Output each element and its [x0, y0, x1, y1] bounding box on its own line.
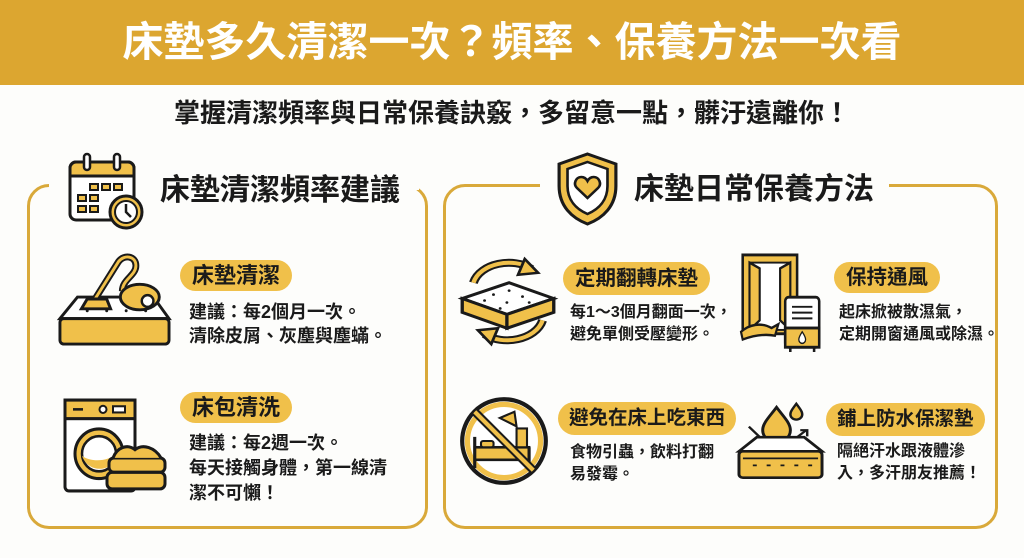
pill: no eating on bed — [558, 402, 736, 435]
panel: cleaning frequency — [27, 184, 428, 529]
text: sheet washing: 每天接觸身體，第一線清 — [189, 458, 387, 478]
text: ventilation: 定期開窗通風或除濕。 — [839, 326, 999, 343]
pill: mattress cleaning — [180, 260, 292, 291]
pill: waterproof pad: 鋪上防水保潔墊 — [837, 408, 974, 430]
pill: flip mattress — [563, 262, 710, 295]
text: mattress cleaning: 清除皮屑、灰塵與塵蟎。 — [189, 326, 387, 346]
text: mattress cleaning — [189, 302, 387, 346]
text: no eating on bed — [570, 443, 714, 483]
icon: shield heart — [558, 152, 618, 226]
icon: window and dehumidifier — [740, 253, 820, 352]
heading: daily care: 床墊日常保養方法 — [634, 173, 874, 206]
text: waterproof pad: 隔絕汗水跟液體滲 — [837, 443, 965, 460]
title: 床墊多久清潔一次？頻率、保養方法一次看 — [122, 19, 902, 65]
text: sheet washing: 潔不可懶！ — [189, 483, 279, 503]
text: waterproof pad: 入，多汗朋友推薦！ — [837, 465, 981, 482]
pill: mattress cleaning: 床墊清潔 — [192, 263, 280, 288]
text: sheet washing — [189, 433, 387, 503]
panel: daily care — [443, 184, 998, 529]
heading: cleaning frequency: 床墊清潔頻率建議 — [160, 174, 400, 207]
icon: washing machine — [64, 398, 166, 492]
icon: waterproof pad — [735, 402, 826, 479]
header banner — [0, 0, 1024, 85]
pill: waterproof pad — [826, 403, 985, 436]
icon: calendar clock — [68, 152, 144, 230]
pill: no eating on bed: 避免在床上吃東西 — [569, 407, 725, 429]
pill: sheet washing: 床包清洗 — [192, 395, 280, 420]
text: mattress cleaning: 建議：每2個月一次。 — [189, 302, 361, 322]
icon: vacuum on mattress — [56, 254, 172, 346]
text: flip mattress — [570, 303, 732, 343]
pill: flip mattress: 定期翻轉床墊 — [575, 267, 698, 290]
pill: sheet washing — [180, 392, 292, 423]
text: flip mattress: 每1～3個月翻面一次， — [570, 304, 732, 321]
text: flip mattress: 避免單側受壓變形。 — [570, 326, 714, 343]
pill: ventilation: 保持通風 — [846, 266, 928, 289]
text: no eating on bed: 食物引蟲，飲料打翻 — [570, 444, 714, 461]
text: ventilation: 起床掀被散濕氣， — [839, 304, 967, 321]
text: no eating on bed: 易發霉。 — [570, 466, 634, 483]
pill: ventilation — [834, 262, 940, 293]
icon: no eating on bed — [460, 397, 548, 485]
text: sheet washing: 建議：每2週一次。 — [189, 433, 343, 453]
text: waterproof pad — [837, 442, 981, 482]
text: ventilation — [839, 303, 999, 343]
icon: flip mattress — [458, 256, 558, 346]
subtitle: 掌握清潔頻率與日常保養訣竅，多留意一點，髒汙遠離你！ — [174, 98, 850, 128]
